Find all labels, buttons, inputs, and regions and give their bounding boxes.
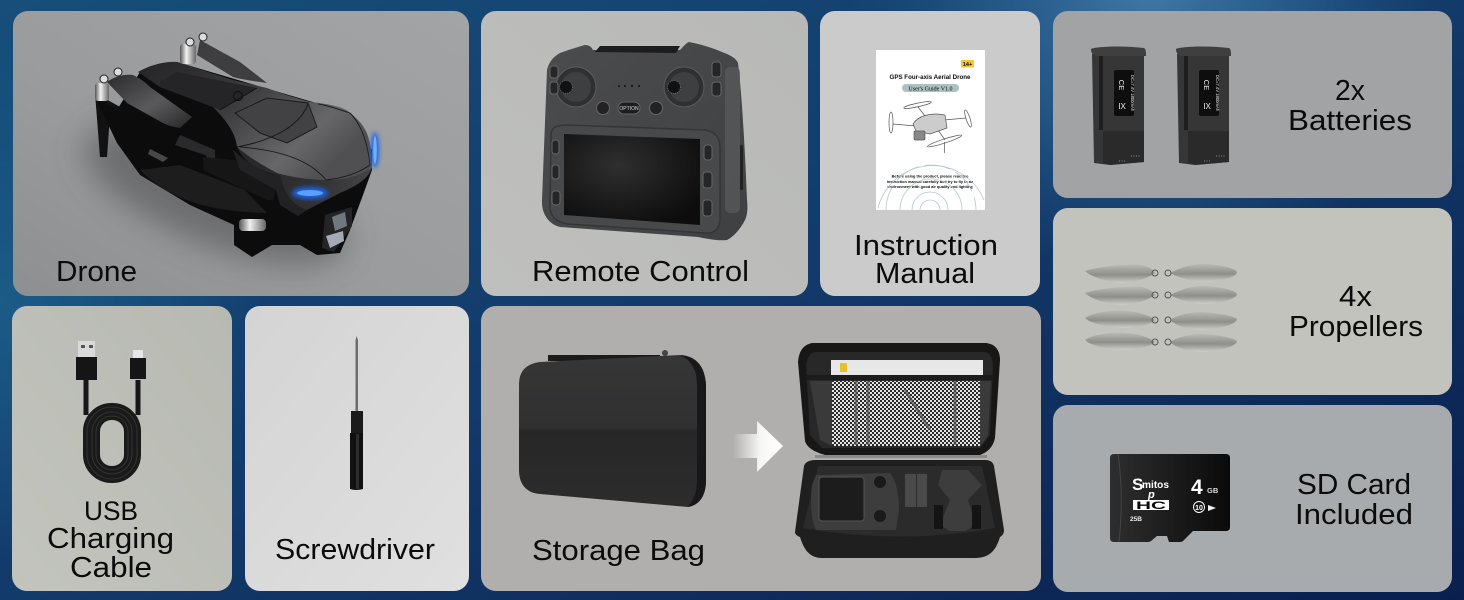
icon: two batteries [1091,46,1231,165]
text: brand: S [1132,475,1143,494]
icon: drone line drawing [889,100,973,153]
label: 4x Propellers: Propellers [1289,311,1423,343]
icon: micro SD card: 25B [1130,516,1142,523]
icon: open storage case with contents [795,343,1004,558]
text: brand: mitos [1142,480,1169,491]
arrow: bag to contents [733,421,783,472]
label: USB Charging Cable: Cable [70,552,152,584]
label: SD Card Included [1295,469,1413,531]
button: OPTION: OPTION [619,106,639,112]
badge: HC: HC [1136,500,1166,512]
icon: USB cable [76,341,146,479]
icon: battery 1: CE [1117,80,1126,90]
icon: remote controller [542,42,747,240]
icon: micro SD card [1110,454,1230,542]
label: USB Charging Cable: USB [84,496,138,526]
label: Storage Bag: Storage Bag [532,535,705,567]
label: 2x Batteries [1288,75,1412,137]
icon: micro SD card: 4 [1191,476,1203,499]
button: OPTION [618,102,640,114]
label: 4x Propellers [1289,281,1423,343]
icon: battery 2 [1176,46,1231,165]
icon: manual booklet [876,50,985,210]
panel: remote control [481,11,808,296]
label: USB Charging Cable [47,496,174,584]
panel: SD card [1053,405,1452,592]
label: 2x Batteries: Batteries [1288,105,1412,137]
icon: micro SD card: 10 [1195,505,1203,512]
text: brand [1132,475,1169,501]
label: Instruction Manual: Manual [875,258,975,290]
icon: screwdriver [350,336,363,490]
panel: propellers [1053,208,1452,395]
icon: eight propeller blades [1085,264,1237,352]
panel: drone [13,11,469,296]
icon: manual booklet: User's Guide V1.0 [908,86,953,92]
panel: instruction manual [820,11,1040,296]
text: safety note: environment with good air quality and lighting [887,184,973,189]
text: safety note [887,174,974,189]
icon: battery 1: IX [1118,102,1126,111]
icon: battery 2: IX [1203,102,1211,111]
label: SD Card Included: SD Card [1297,469,1411,501]
label: Instruction Manual [854,230,998,290]
label: Screwdriver: Screwdriver [275,534,435,566]
icon: closed storage bag [519,350,706,507]
text: brand: p [1147,489,1155,501]
label: Drone: Drone [56,256,137,288]
icon: battery 1 [1091,46,1146,165]
icon: battery 2: CE [1202,80,1211,90]
panel: batteries [1053,11,1452,198]
panel: storage bag [481,306,1041,591]
label: 4x Propellers: 4x [1339,281,1373,313]
label: 2x Batteries: 2x [1335,75,1365,107]
label: SD Card Included: Included [1295,499,1413,531]
panel: screwdriver [245,306,469,591]
panel: USB charging cable [12,306,232,591]
label: Remote Control: Remote Control [532,256,749,288]
text: safety note: Before using the product, please read the [892,174,969,178]
icon: manual booklet: GPS Four-axis Aerial Drone [890,74,971,81]
icon: micro SD card: GB [1207,486,1219,495]
label: USB Charging Cable: Charging [47,523,174,555]
text: safety note: instruction manual carefully and try to fly in an [887,179,974,184]
icon: manual booklet: 14+ [963,62,972,68]
icon: folded drone [66,33,379,294]
icon: battery 1: DC=7.4V 1800mAh [1130,75,1135,112]
label: Instruction Manual: Instruction [854,230,998,262]
icon: battery 2: DC=7.4V 1800mAh [1215,75,1220,112]
icon: blue LEDs [292,132,379,199]
